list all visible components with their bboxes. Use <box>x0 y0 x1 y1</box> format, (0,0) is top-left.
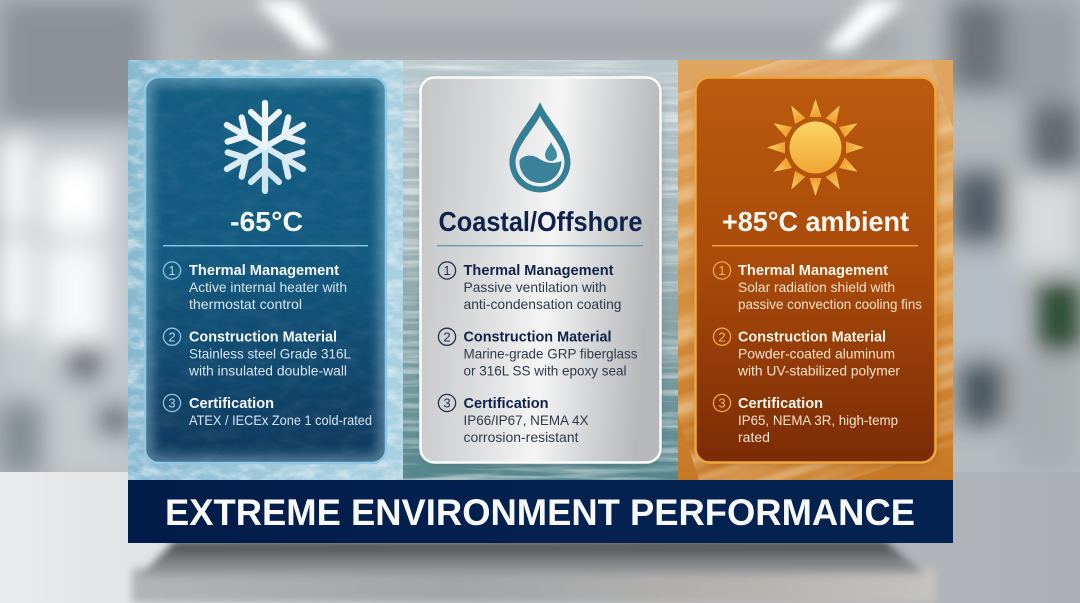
item: construction material <box>438 328 638 378</box>
icon: water drop <box>510 102 570 192</box>
item: thermal management <box>713 262 922 312</box>
item: certification: Certification <box>738 395 823 412</box>
item: construction material: 2 <box>443 329 451 344</box>
item: construction material: with insulated double-wall <box>188 362 347 378</box>
item: thermal management: Thermal Management <box>189 262 339 279</box>
item: thermal management: Solar radiation shield with <box>738 279 895 295</box>
item: construction material <box>163 328 351 378</box>
coastal card <box>420 78 660 462</box>
panel: hot environment <box>678 60 953 480</box>
icon: sun <box>767 99 864 196</box>
item: construction material: Marine-grade GRP fiberglass <box>464 346 638 362</box>
item: certification: 3 <box>443 396 451 410</box>
item: certification: 3 <box>168 396 176 410</box>
item: certification: rated <box>738 429 770 445</box>
item: construction material: or 316L SS with epoxy seal <box>464 362 626 378</box>
title banner <box>128 480 953 543</box>
item: certification <box>163 394 372 428</box>
item: thermal management: passive convection cooling fins <box>738 296 922 312</box>
item: certification: IP65, NEMA 3R, high-temp <box>738 412 898 428</box>
item: construction material: 2 <box>168 329 176 344</box>
item: thermal management: Thermal Management <box>738 262 888 279</box>
item: certification: Certification <box>464 395 548 412</box>
item: construction material: Construction Material <box>189 328 337 346</box>
cold card <box>145 77 386 463</box>
icon: snowflake <box>220 103 310 191</box>
item: certification: ATEX / IECEx Zone 1 cold-rated <box>189 412 372 428</box>
item: construction material: Construction Material <box>738 328 886 346</box>
item: certification: IP66/IP67, NEMA 4X <box>464 412 589 428</box>
divider <box>163 245 368 246</box>
item: certification: corrosion-resistant <box>464 429 579 445</box>
divider <box>712 245 918 246</box>
infographic board <box>128 60 953 543</box>
item: certification: 3 <box>718 396 726 410</box>
table surface with reflection <box>0 472 1080 603</box>
blurred office background <box>0 0 1080 472</box>
sand texture background <box>678 60 953 480</box>
item: construction material: Stainless steel Grade 316L <box>189 346 351 362</box>
panel: cold environment <box>128 60 403 480</box>
item: construction material: Construction Material <box>464 328 612 346</box>
item: thermal management: 1 <box>718 263 726 278</box>
title banner: EXTREME ENVIRONMENT PERFORMANCE <box>165 491 915 533</box>
item: certification <box>713 394 898 445</box>
item: certification <box>438 394 589 445</box>
item: thermal management <box>163 262 347 312</box>
water texture background <box>403 60 678 480</box>
item: thermal management: Passive ventilation with <box>464 279 606 295</box>
hot card <box>696 78 936 462</box>
frost texture background <box>128 60 403 480</box>
heading: -65°C: -65°C <box>230 206 303 237</box>
item: thermal management: 1 <box>168 263 176 278</box>
item: construction material <box>713 328 900 378</box>
item: thermal management <box>438 262 622 312</box>
item: thermal management: anti-condensation coating <box>464 296 622 312</box>
item: thermal management: thermostat control <box>189 296 302 312</box>
panel: coastal environment <box>403 60 678 480</box>
item: construction material: with UV-stabilized polymer <box>737 362 900 378</box>
heading: Coastal/Offshore: Coastal/Offshore <box>438 206 642 237</box>
item: construction material: Powder-coated aluminum <box>738 346 895 362</box>
item: certification: Certification <box>189 395 274 412</box>
divider <box>437 245 643 246</box>
item: thermal management: 1 <box>443 263 451 278</box>
item: thermal management: Active internal heater with <box>189 279 347 295</box>
item: construction material: 2 <box>718 329 726 344</box>
item: thermal management: Thermal Management <box>464 262 614 279</box>
heading: +85°C ambient: +85°C ambient <box>722 206 909 237</box>
